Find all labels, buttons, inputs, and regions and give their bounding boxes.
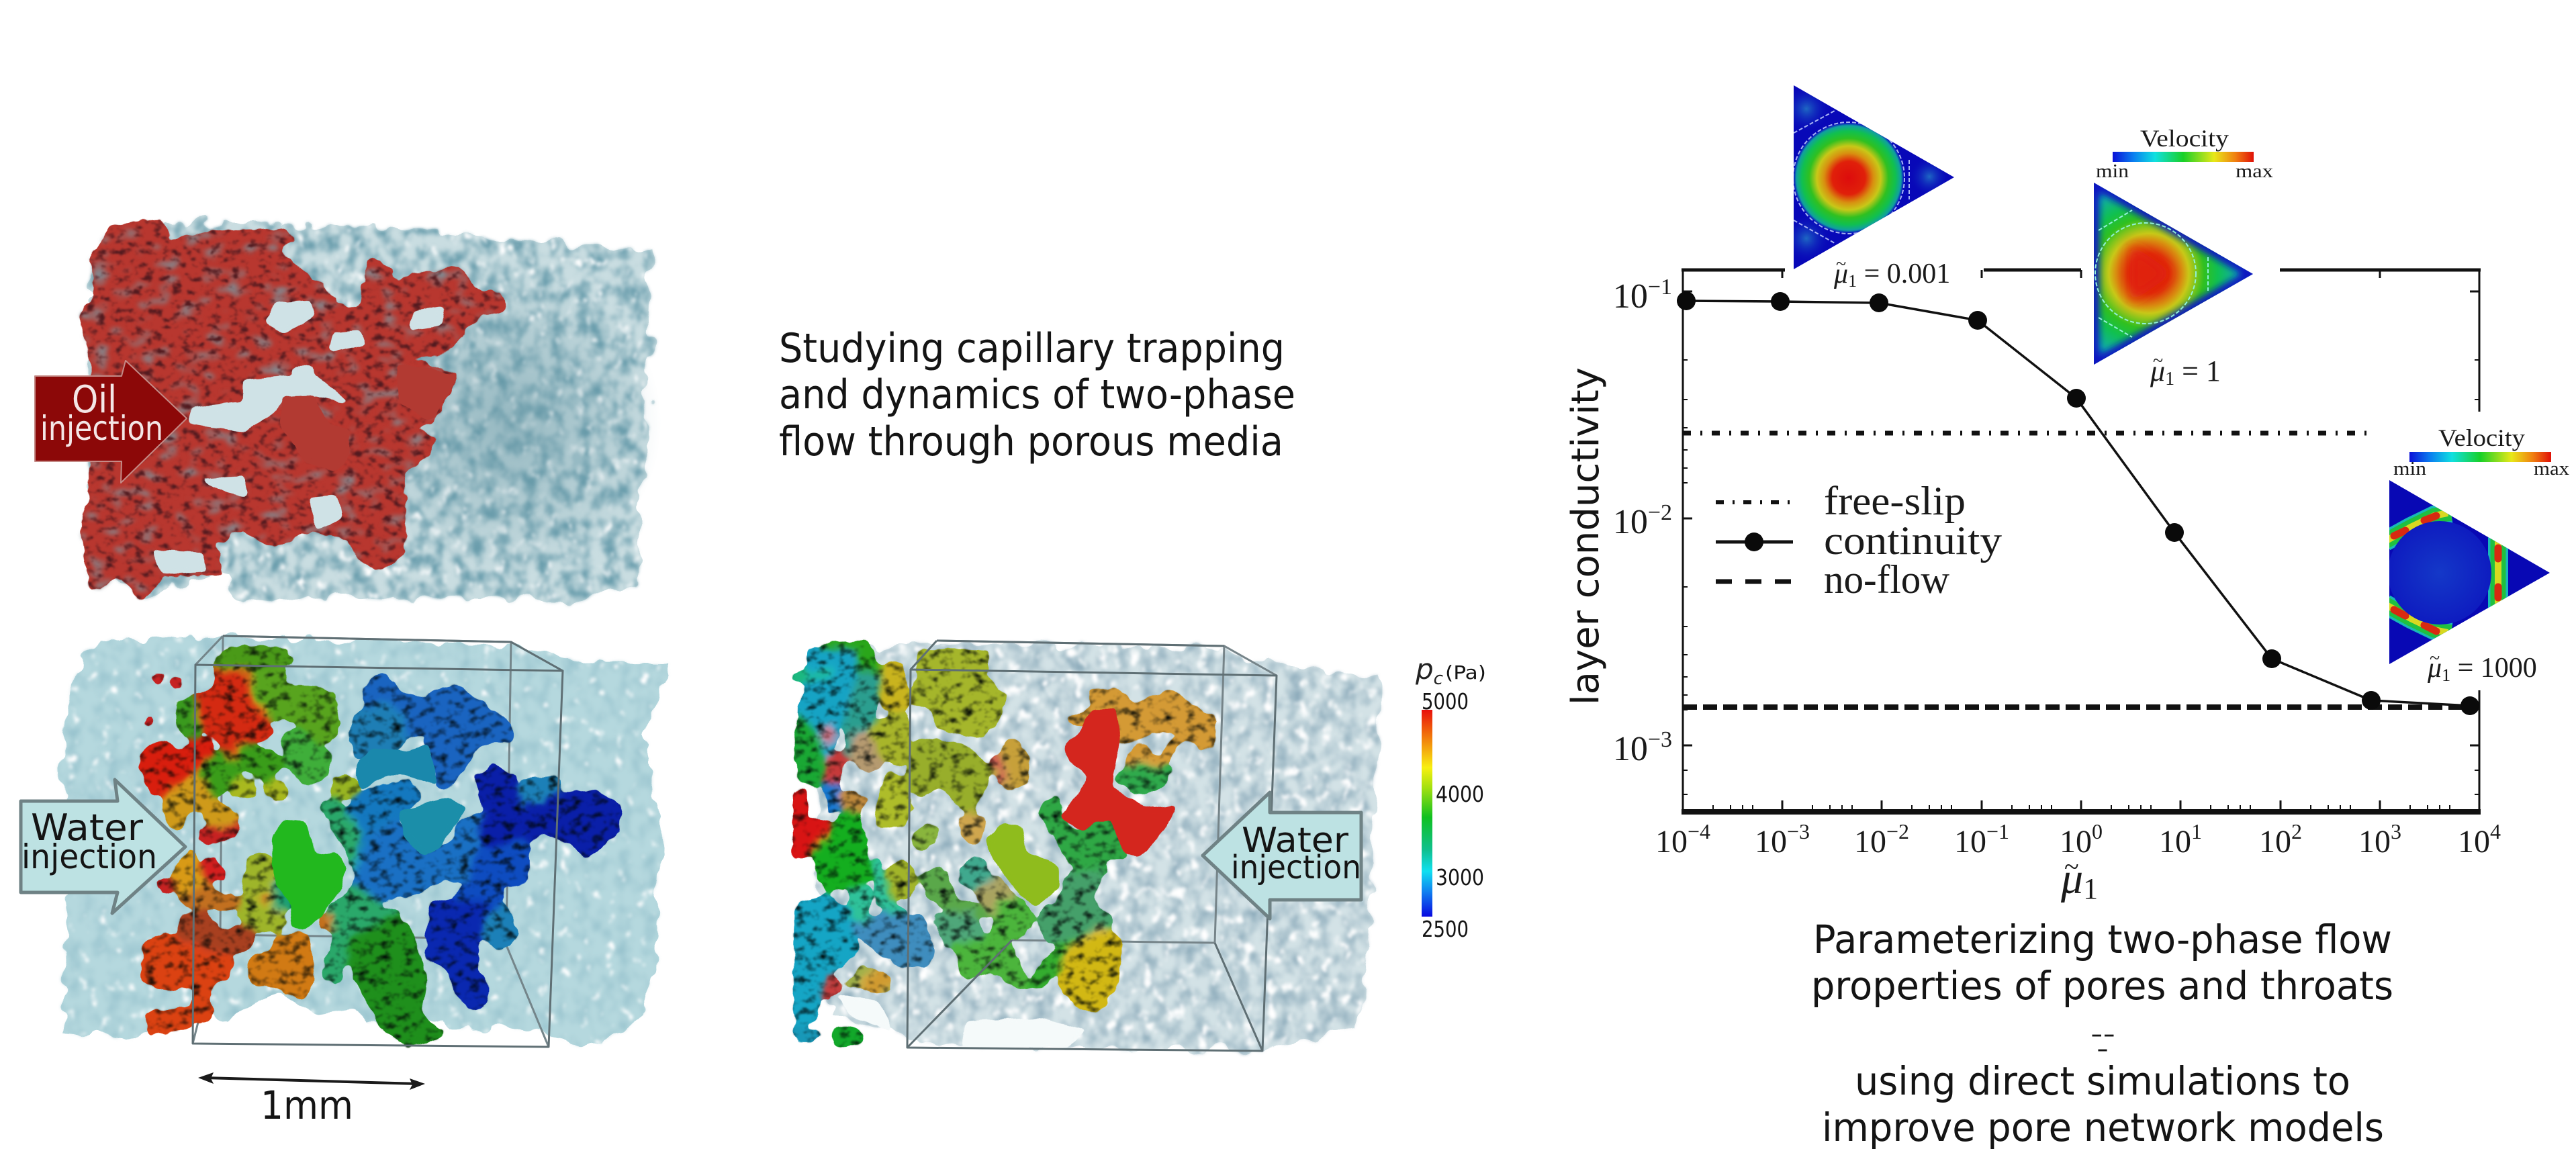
text block: parameterizing caption: Parameterizing two-phase flow: [1813, 917, 2392, 962]
colour legend: velocity: [2393, 424, 2569, 479]
arrow: oil injection: [35, 361, 187, 483]
colour legend: velocity: Velocity: [2438, 424, 2525, 451]
arrow: water injection from right: injection: [1231, 849, 1361, 886]
viscosity label: μ: [1833, 259, 1848, 289]
pore space cloud: [63, 638, 666, 1046]
legend: continuity: [1824, 518, 2002, 563]
x tick labels: −3: [1787, 819, 1810, 843]
x tick labels: 3: [2391, 819, 2401, 843]
colour bar: capillary pressure: c: [1434, 669, 1443, 689]
dense pore region shading: [359, 269, 661, 578]
arrow: water injection from left: Water: [31, 806, 144, 849]
y tick labels: −3: [1648, 727, 1672, 752]
x tick labels: 0: [2092, 819, 2103, 843]
front edges of sample box: [193, 636, 563, 1047]
text block: parameterizing caption: --: [2090, 1021, 2115, 1048]
x tick labels: 10: [1954, 824, 1986, 860]
text block: parameterizing caption: -: [2097, 1035, 2109, 1063]
continuity data series: [1677, 291, 2479, 715]
colour legend: velocity: [2096, 125, 2273, 182]
arrow: oil injection: Oil: [72, 378, 117, 422]
arrow: water injection from right: Water: [1242, 821, 1349, 861]
colour bar: capillary pressure: (Pa): [1445, 661, 1486, 684]
no-flow reference line: [1683, 704, 2478, 710]
text block: parameterizing caption: [1811, 917, 2393, 1150]
viscosity label: [2427, 648, 2537, 685]
white void at bottom of sample: [198, 992, 387, 1049]
viscosity label: = 0.001: [1857, 259, 1950, 289]
scale bar: 1mm: [198, 1072, 425, 1128]
arrow: water injection from left: [21, 780, 185, 913]
legend: no-flow: [1824, 557, 1950, 602]
flat oil lobes: [279, 363, 459, 471]
x axis title: 1: [2083, 872, 2098, 905]
x tick labels: −2: [1886, 819, 1909, 843]
colour bar: capillary pressure: [1415, 653, 1486, 942]
viscosity label: ~: [2430, 648, 2440, 669]
viscosity label: 1: [2442, 665, 2450, 685]
viscosity label: μ: [2150, 355, 2165, 387]
x axis title: μ: [2061, 854, 2083, 903]
triangle velocity map: [2385, 480, 2550, 664]
flat cut-face clusters: [986, 709, 1177, 908]
colour bar: capillary pressure: 3000: [1436, 864, 1484, 890]
viscosity label: μ: [2427, 653, 2442, 684]
arrow: water injection from right: [1203, 792, 1361, 919]
text block: capillary trapping description: flow through porous media: [779, 418, 1283, 465]
x tick labels: 10: [1655, 824, 1688, 860]
triangle velocity map: [2094, 183, 2254, 365]
x tick labels: 1: [2191, 819, 2202, 843]
scale bar: 1mm: 1mm: [261, 1082, 353, 1128]
colour bar: capillary pressure: 2500: [1422, 916, 1469, 942]
panel: water injection from left: [21, 636, 666, 1128]
inset: velocity field at low viscosity: [1782, 85, 1954, 291]
colour bar: capillary pressure: p: [1416, 653, 1434, 686]
inset: velocity field at unit viscosity: [2094, 125, 2273, 389]
viscosity label: [2150, 351, 2221, 389]
y tick labels: −2: [1648, 500, 1672, 525]
x tick labels: 4: [2490, 819, 2501, 843]
x tick labels: 2: [2291, 819, 2302, 843]
trapped water clusters coloured by capillary pressure: [142, 648, 618, 1046]
colour bar: capillary pressure: 5000: [1422, 688, 1469, 714]
x tick labels: 10: [2458, 824, 2490, 860]
viscosity label: 1: [1848, 271, 1857, 291]
y tick labels: 10: [1613, 503, 1648, 541]
x tick labels: 10: [1854, 824, 1886, 860]
oil phase: [81, 220, 506, 599]
colour legend: velocity: max: [2534, 459, 2569, 479]
panel: water injection from right: [795, 641, 1379, 1052]
plot frame and ticks: [1682, 270, 2481, 813]
colour legend: velocity: max: [2236, 161, 2273, 182]
text block: parameterizing caption: using direct simulations to: [1855, 1058, 2350, 1104]
legend: [1716, 479, 2002, 602]
colour legend: velocity: min: [2393, 459, 2426, 479]
y tick labels: 10: [1613, 730, 1648, 768]
x tick labels: 10: [2060, 824, 2092, 860]
viscosity label: ~: [2153, 351, 2163, 371]
chart: layer conductivity vs viscosity ratio: [1564, 270, 2501, 905]
y axis title: layer conductivity: [1564, 367, 1608, 705]
free-slip reference line: [1683, 431, 2373, 435]
text block: capillary trapping description: [779, 325, 1295, 465]
x tick labels: [1655, 819, 2501, 860]
text block: parameterizing caption: improve pore network models: [1822, 1105, 2384, 1150]
pore space cloud: [819, 643, 1379, 1052]
triangle velocity map: [1782, 85, 1954, 269]
colour bar: capillary pressure: 4000: [1436, 781, 1484, 807]
text block: capillary trapping description: and dynamics of two-phase: [779, 371, 1295, 418]
white voids near bottom of sample: [833, 992, 1087, 1048]
gaps in the oil phase: [153, 300, 445, 574]
pore space cloud: [90, 222, 653, 602]
trapped water clusters coloured by capillary pressure: [795, 643, 1215, 1044]
y tick labels: [1613, 275, 1672, 768]
viscosity label: = 1000: [2450, 653, 2537, 684]
arrow: water injection from left: injection: [21, 837, 157, 876]
text block: capillary trapping description: Studying capillary trapping: [779, 325, 1285, 372]
x axis title: ~: [2064, 851, 2079, 882]
x tick labels: 10: [2358, 824, 2391, 860]
text block: parameterizing caption: properties of pores and throats: [1811, 963, 2393, 1009]
y tick labels: 10: [1613, 277, 1648, 316]
viscosity label: = 1: [2174, 355, 2221, 387]
x tick labels: 10: [2159, 824, 2191, 860]
back edges of sample box: [193, 636, 563, 1047]
x tick labels: −4: [1688, 819, 1710, 843]
arrow: oil injection: injection: [40, 409, 163, 448]
inset: velocity field at high viscosity: [2385, 424, 2569, 685]
panel: oil injection simulation: [35, 220, 661, 602]
back edges of sample box: [937, 641, 1277, 943]
colour legend: velocity: min: [2096, 161, 2129, 182]
front edges of sample box: [907, 641, 1277, 1051]
x axis title: [2060, 851, 2098, 905]
x tick labels: 10: [2259, 824, 2291, 860]
y tick labels: −1: [1648, 275, 1672, 299]
viscosity label: 1: [2165, 369, 2174, 389]
x tick labels: −1: [1986, 819, 2009, 843]
viscosity label: ~: [1836, 254, 1846, 275]
colour legend: velocity: Velocity: [2140, 125, 2229, 152]
x tick labels: 10: [1755, 824, 1787, 860]
viscosity label: [1833, 254, 1950, 291]
legend: free-slip: [1824, 479, 1966, 523]
flat cut-face clusters: [272, 745, 468, 930]
